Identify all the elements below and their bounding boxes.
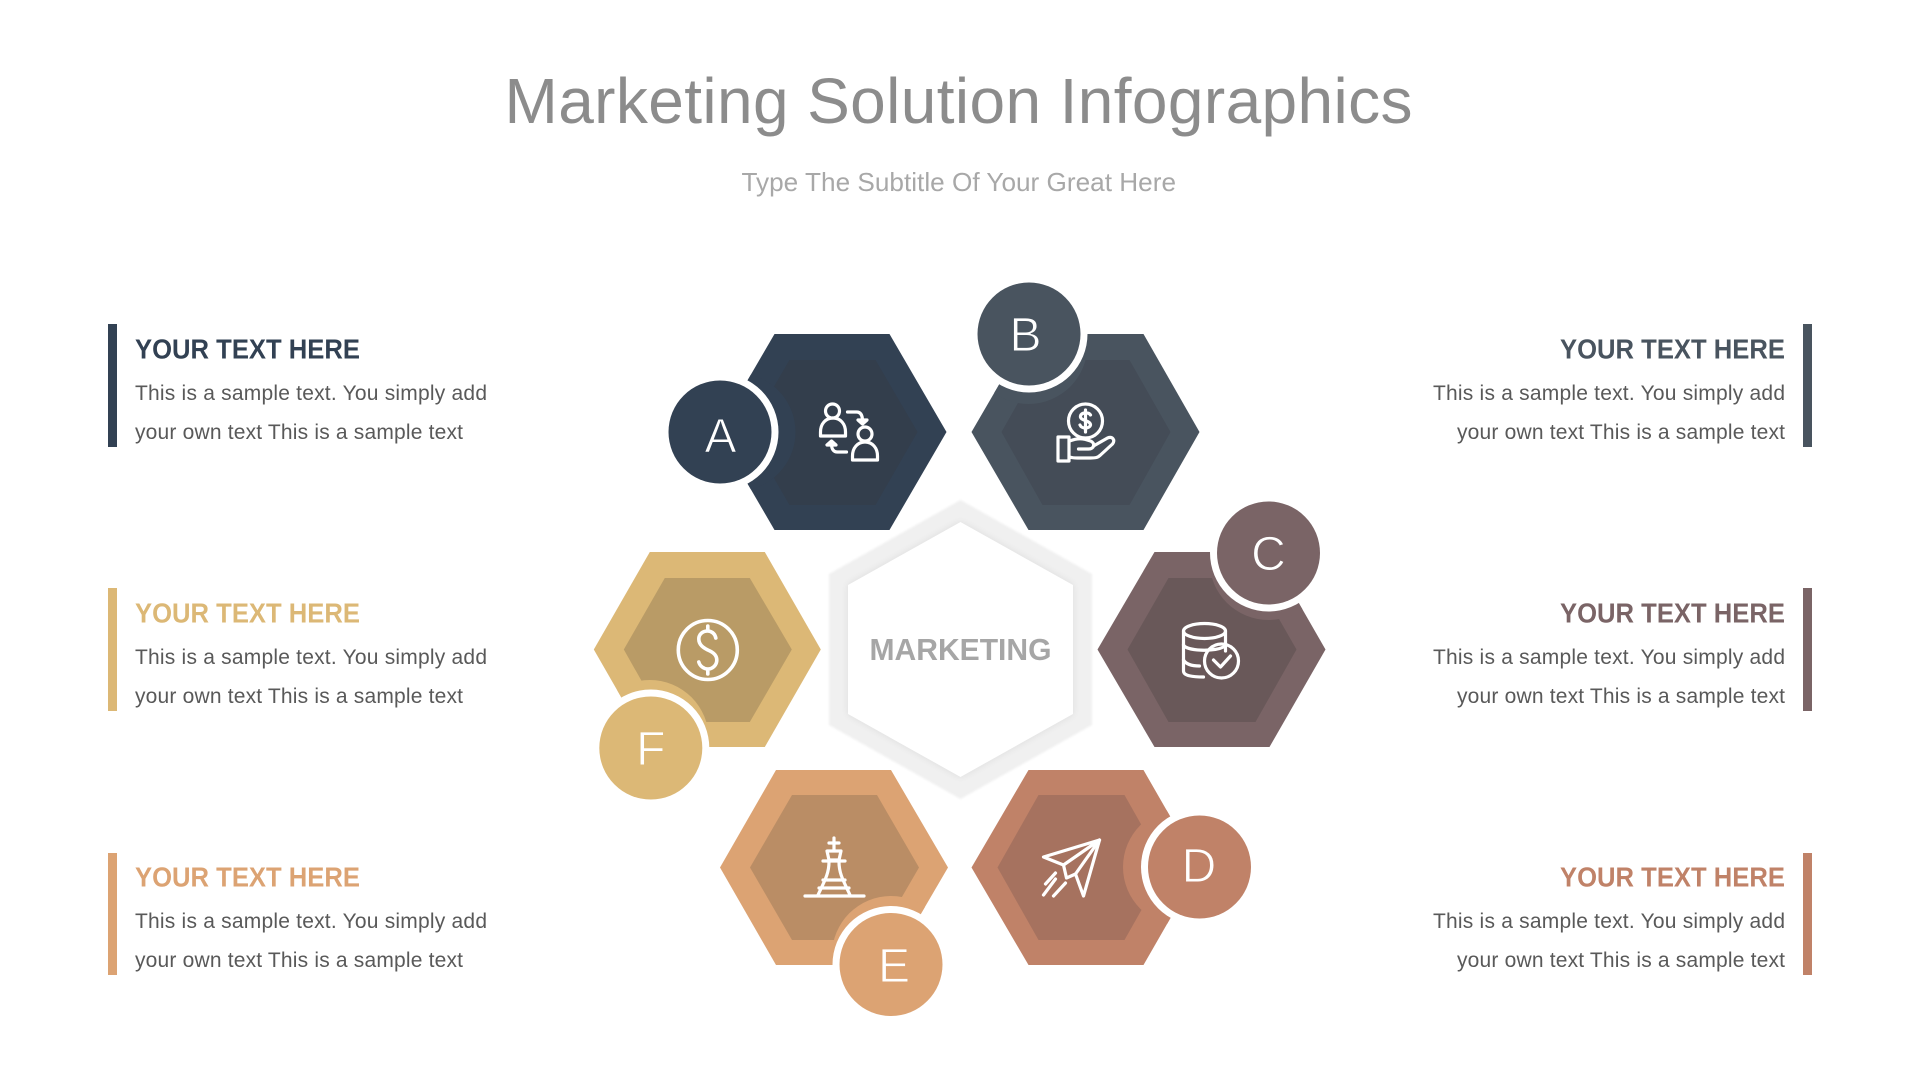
panel: text block E [108,853,487,975]
accent bar C [1803,588,1812,711]
body A: This is a sample text. You simply add [135,382,487,405]
body C: This is a sample text. You simply add [1433,646,1785,669]
hexagon A [662,334,946,530]
badge letter E: E [878,940,910,993]
accent bar F [108,588,117,711]
heading A: YOUR TEXT HERE [135,334,360,364]
center hexagon [829,500,1092,799]
heading E: YOUR TEXT HERE [135,862,360,892]
panel: text block A [108,324,487,447]
body C: your own text This is a sample text [1457,685,1785,708]
badge letter B: B [1009,309,1042,362]
body C [1433,646,1785,708]
hexagon D [972,770,1258,965]
hexagon C [1098,494,1328,747]
body D: This is a sample text. You simply add [1433,910,1785,933]
body E [135,910,487,972]
icon: hand with coin [1058,404,1114,461]
title: Marketing Solution Infographics [504,65,1412,137]
icon: database check [1184,624,1238,678]
heading B: YOUR TEXT HERE [1560,334,1785,364]
badge letter F: F [636,723,665,776]
heading C: YOUR TEXT HERE [1560,598,1785,628]
body D: your own text This is a sample text [1457,949,1785,972]
panel: text block C [1433,588,1812,711]
icon: people swap [820,404,878,460]
accent bar D [1803,853,1812,975]
subtitle: Type The Subtitle Of Your Great Here [742,167,1176,197]
badge letter A: A [704,410,737,463]
body B [1433,382,1785,444]
center label: MARKETING [870,632,1052,667]
hexagon B [970,276,1200,530]
body E: This is a sample text. You simply add [135,910,487,933]
body F: This is a sample text. You simply add [135,646,487,669]
icon: chess king [805,838,864,896]
body A: your own text This is a sample text [135,421,463,444]
body B: This is a sample text. You simply add [1433,382,1785,405]
panel: text block D [1433,853,1812,975]
body A [135,382,487,444]
body E: your own text This is a sample text [135,949,463,972]
body F: your own text This is a sample text [135,685,463,708]
hexagon E [720,770,950,1023]
body F [135,646,487,708]
icon: dollar coin [678,620,737,680]
body B: your own text This is a sample text [1457,421,1785,444]
heading F: YOUR TEXT HERE [135,598,360,628]
icon: paper plane [1044,840,1100,896]
body D [1433,910,1785,972]
heading D: YOUR TEXT HERE [1560,862,1785,892]
badge letter D: D [1182,840,1216,893]
panel: text block F [108,588,487,711]
hexagon F [591,552,821,806]
accent bar A [108,324,117,447]
badge letter C: C [1251,528,1286,581]
accent bar E [108,853,117,975]
panel: text block B [1433,324,1812,447]
accent bar B [1803,324,1812,447]
